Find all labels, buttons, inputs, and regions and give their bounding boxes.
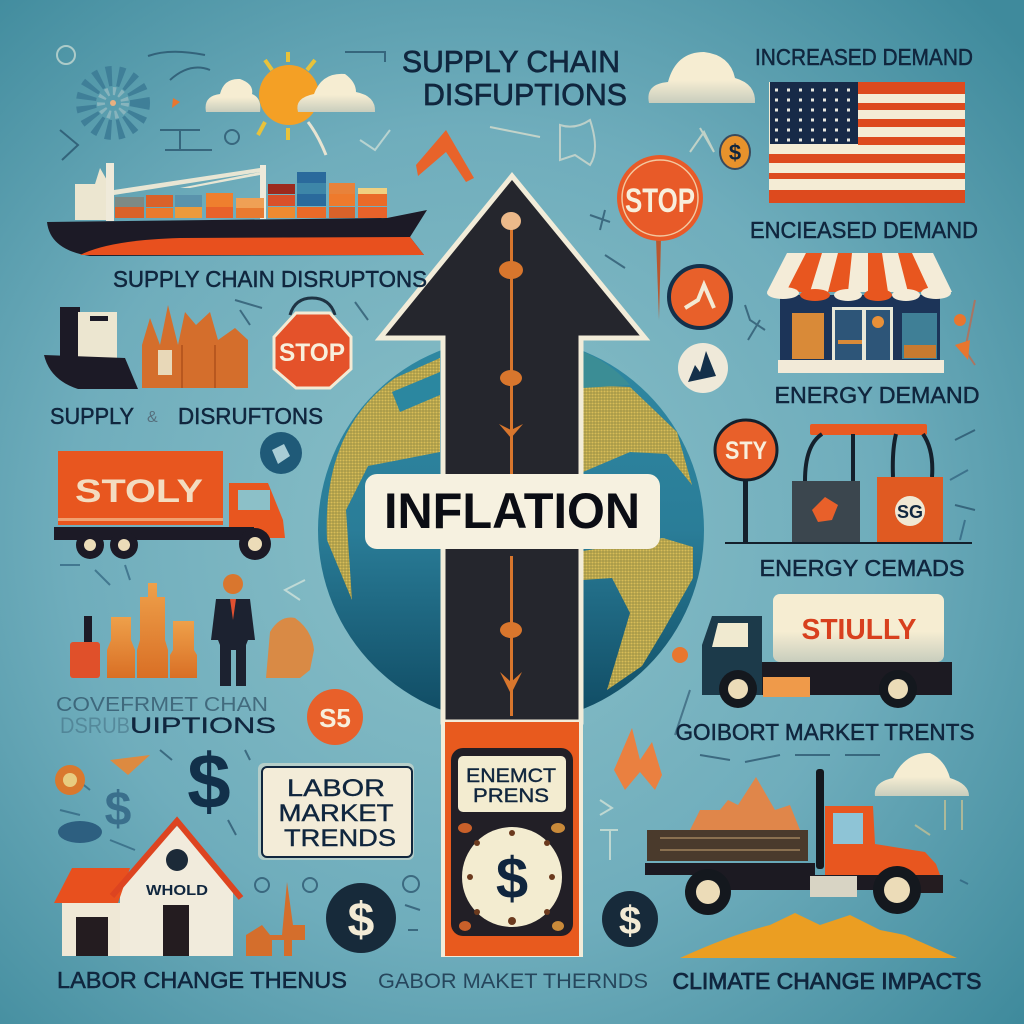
globe bbox=[318, 337, 704, 723]
icon: dollar signs: $ bbox=[187, 737, 231, 825]
goods jars bbox=[70, 583, 197, 678]
icon: dollar signs bbox=[55, 737, 231, 843]
dollar circle bbox=[602, 891, 658, 947]
stop sign: octagon: STOP bbox=[279, 339, 345, 367]
label: SUPPLY CHAIN DISRUPTONS bbox=[113, 266, 427, 292]
labor market sign: LABOR bbox=[287, 775, 385, 802]
sand pile bbox=[680, 913, 957, 958]
icon: small orange bits bbox=[172, 98, 970, 663]
truck: stoly bbox=[54, 451, 285, 560]
heading: increased demand: INCREASED DEMAND bbox=[755, 44, 973, 70]
label: DISRUFTONS bbox=[178, 403, 323, 429]
ship bbox=[47, 163, 427, 256]
bottom label: LABOR CHANGE THENUS bbox=[57, 967, 347, 993]
house bbox=[54, 821, 241, 956]
heading: supply chain disruptions: SUPPLY CHAIN bbox=[402, 44, 620, 79]
labor market sign bbox=[258, 763, 414, 860]
icon: dollar coin: $ bbox=[729, 140, 741, 165]
labor market sign: MARKET bbox=[278, 800, 394, 827]
label: UIPTIONS bbox=[130, 713, 276, 738]
energy bags bbox=[725, 424, 972, 544]
cloud bbox=[875, 753, 969, 796]
orange bag bbox=[266, 618, 314, 678]
businessman bbox=[211, 574, 255, 686]
dollar circle bbox=[326, 883, 396, 953]
icon: dollar signs: $ bbox=[105, 783, 132, 836]
label bbox=[56, 694, 276, 738]
sign: sty: STY bbox=[725, 437, 767, 465]
icon: dollar coin bbox=[720, 135, 750, 169]
icon: orange caret bbox=[416, 130, 474, 182]
badge: s5: S5 bbox=[319, 703, 351, 733]
icon: small circle bbox=[260, 432, 302, 474]
labor market sign: TRENDS bbox=[284, 825, 396, 852]
energy bags: SG bbox=[897, 502, 923, 522]
icon: sun and clouds bbox=[206, 52, 375, 155]
label: & bbox=[147, 409, 158, 426]
sign: sty bbox=[715, 420, 777, 543]
small ship with goods bbox=[44, 305, 248, 389]
containers bbox=[115, 172, 387, 218]
tanker bbox=[702, 594, 952, 708]
stop sign: octagon bbox=[274, 298, 351, 388]
truck: burning bbox=[645, 769, 943, 915]
label: GOIBORT MARKET TRENTS bbox=[676, 719, 974, 745]
heading: supply chain disruptions: DISFUPTIONS bbox=[423, 77, 627, 112]
truck: stoly: STOLY bbox=[75, 473, 203, 509]
gauge panel: $ bbox=[496, 846, 528, 911]
label: ENERGY CEMADS bbox=[760, 555, 964, 581]
arrow bbox=[380, 176, 645, 957]
icon: flame bbox=[614, 728, 662, 790]
stop sign: round bbox=[617, 155, 703, 320]
arrow spine bbox=[499, 212, 523, 716]
label: ENCIEASED DEMAND bbox=[750, 217, 978, 243]
gauge panel bbox=[451, 748, 573, 936]
inflation label bbox=[365, 474, 660, 549]
badge: s5 bbox=[307, 689, 363, 745]
icon: cloud bbox=[648, 52, 755, 103]
label: ENERGY DEMAND bbox=[774, 382, 980, 408]
flag bbox=[769, 82, 965, 203]
badge: chevron bbox=[669, 266, 731, 328]
gauge panel: ENEMCT bbox=[466, 766, 556, 787]
icon: wind wheel bbox=[86, 76, 140, 130]
stop sign: round: STOP bbox=[625, 182, 695, 220]
heading: supply chain disruptions bbox=[402, 44, 627, 112]
bottom label: GABOR MAKET THERNDS bbox=[378, 970, 648, 993]
label: COVEFRMET CHAN bbox=[56, 694, 268, 716]
orange weather vane bbox=[246, 882, 305, 956]
label bbox=[50, 403, 323, 429]
house: WHOLD bbox=[146, 882, 208, 899]
dollar circle: $ bbox=[619, 899, 641, 943]
small doodle icons bbox=[57, 46, 975, 930]
gauge panel: PRENS bbox=[473, 786, 549, 807]
tanker: STIULLY bbox=[802, 614, 916, 646]
dollar circle: $ bbox=[348, 894, 375, 947]
label: DSRUB bbox=[60, 713, 130, 738]
inflation label: INFLATION bbox=[384, 483, 640, 539]
badge: mountain bbox=[678, 343, 728, 393]
label: SUPPLY bbox=[50, 403, 134, 429]
bottom label: CLIMATE CHANGE IMPACTS bbox=[672, 968, 982, 994]
storefront bbox=[767, 253, 952, 373]
